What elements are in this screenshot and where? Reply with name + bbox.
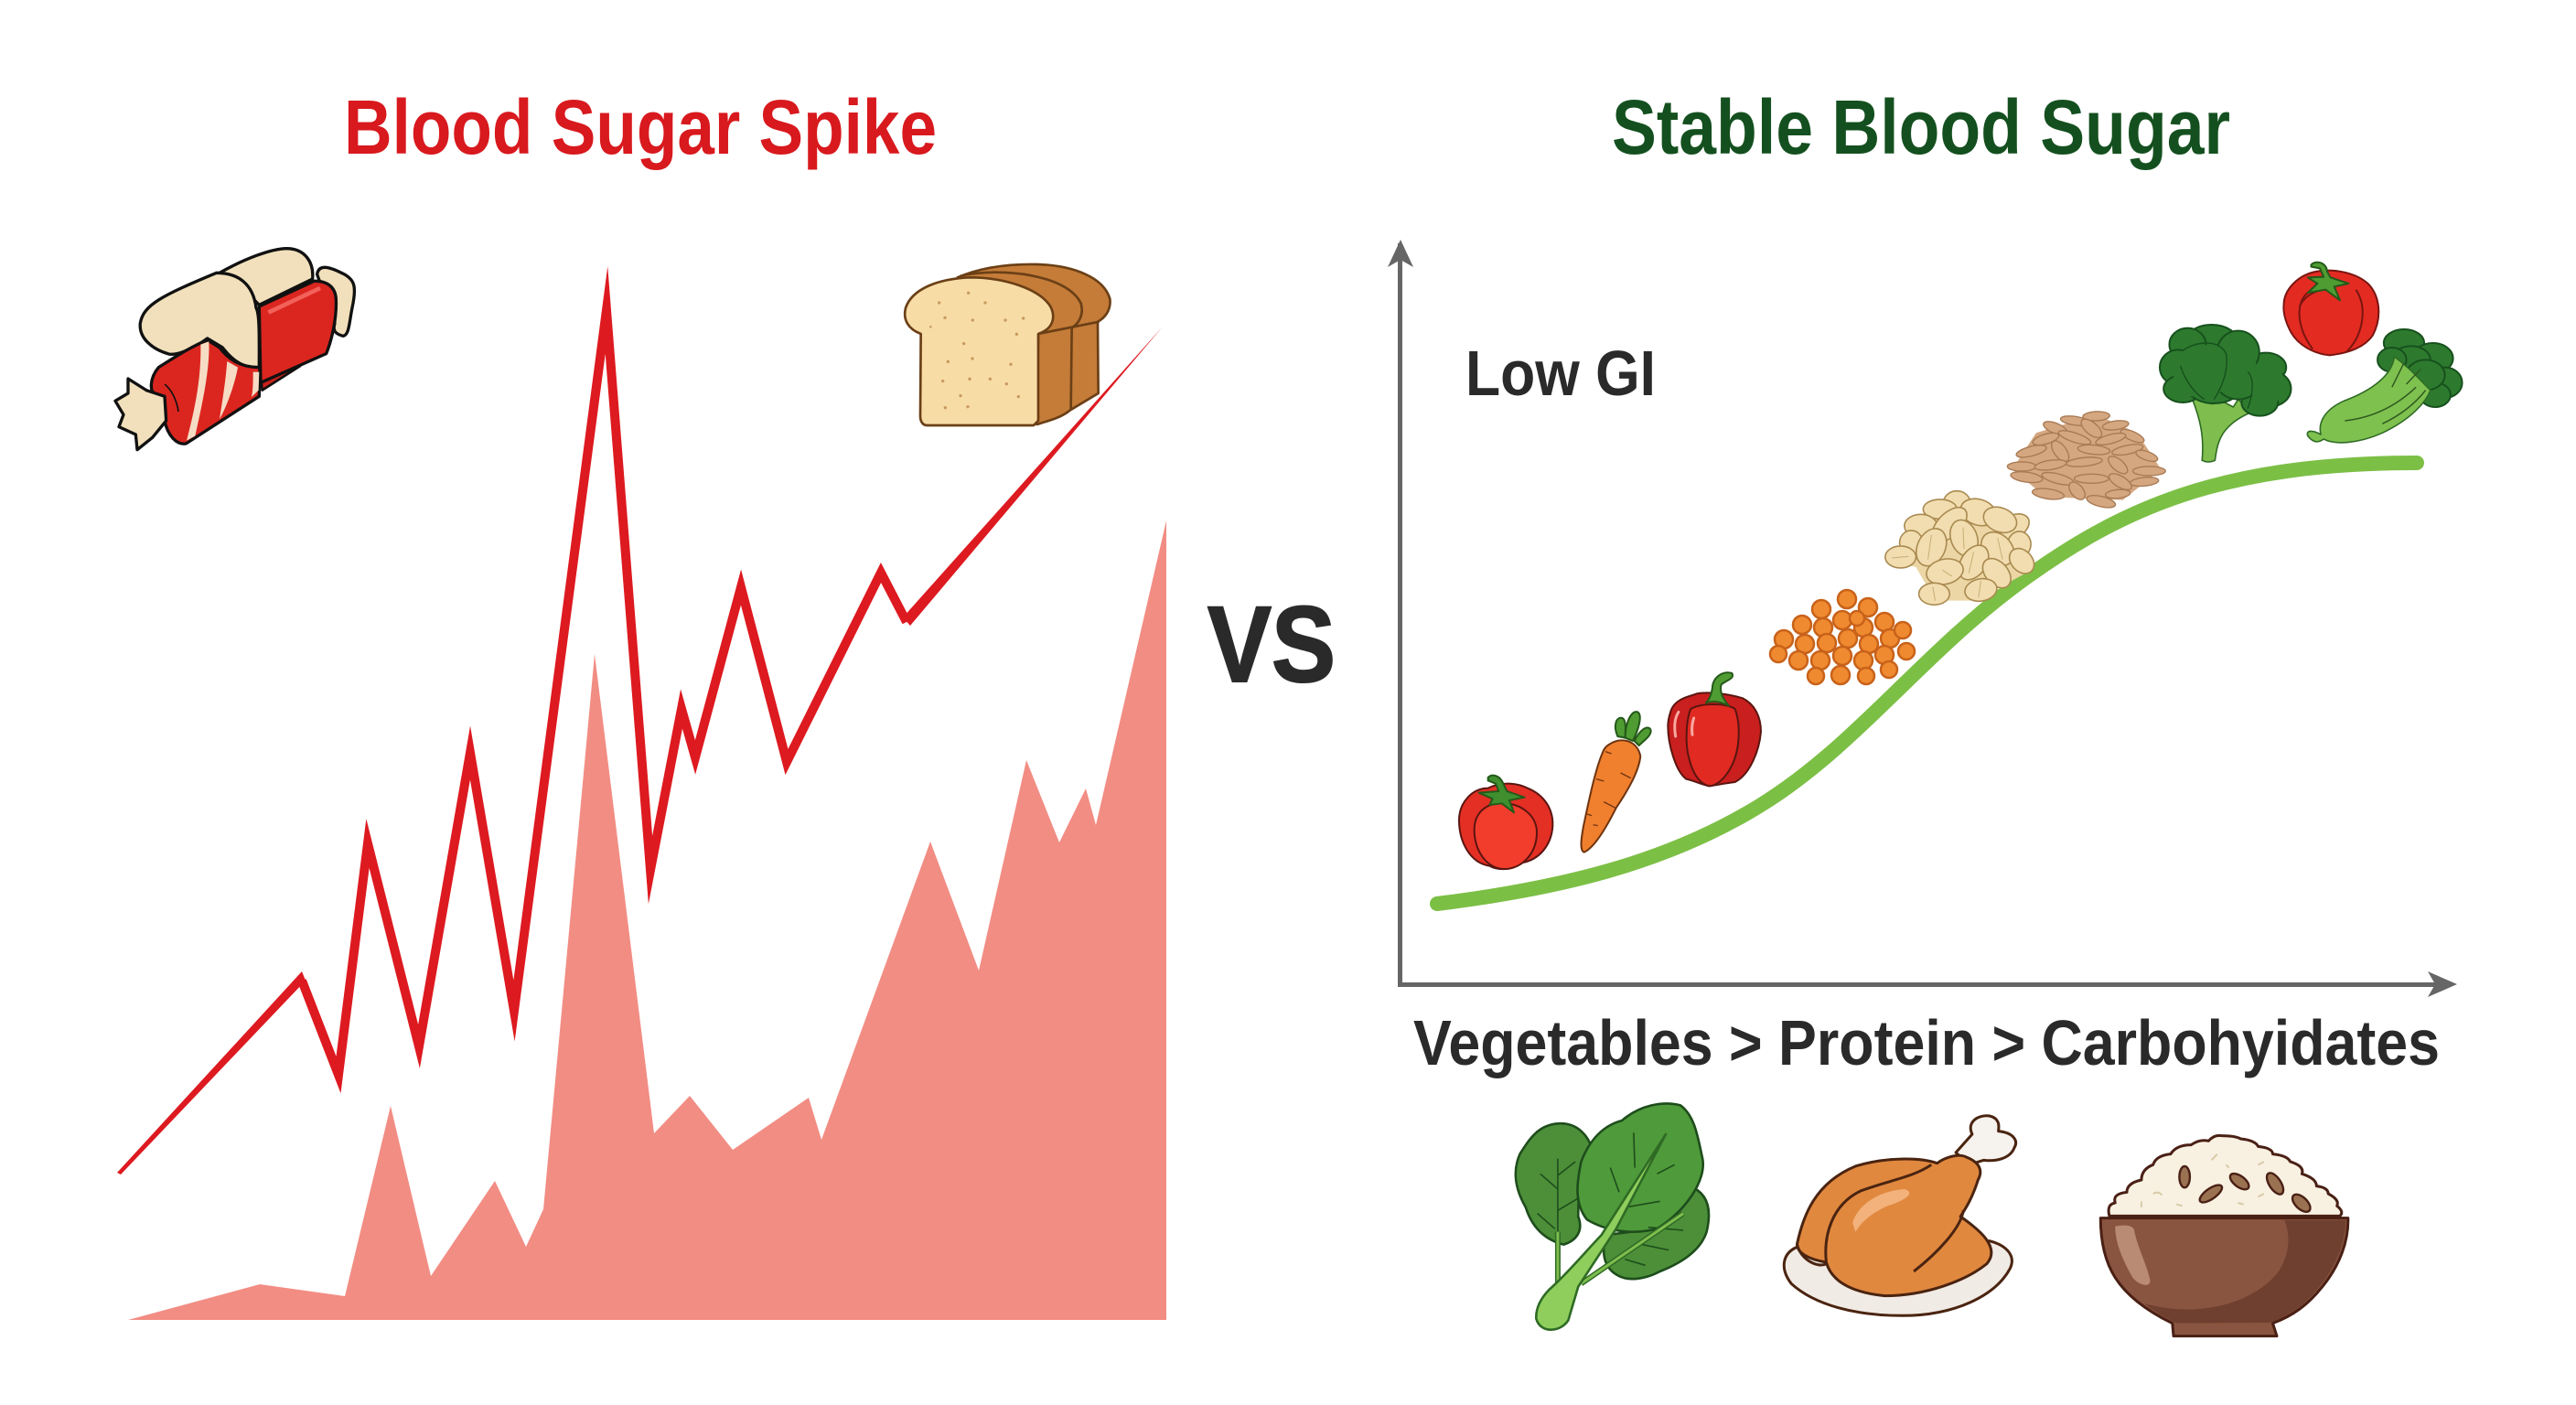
icon: roast chicken xyxy=(1784,1116,2016,1315)
axes with arrows xyxy=(1388,240,2457,997)
label: Low GI: Low GI xyxy=(1465,338,1656,409)
icon: oats xyxy=(1885,491,2038,605)
title: Blood Sugar Spike: Blood Sugar Spike xyxy=(344,84,937,170)
line chart: blood sugar spike xyxy=(117,310,1163,1174)
icon: red lentils xyxy=(1770,590,1915,684)
icon: tomato xyxy=(1459,776,1552,869)
icon: red bell pepper xyxy=(1668,672,1761,786)
icon: leafy greens xyxy=(1516,1103,1709,1330)
icon: broccoli xyxy=(2160,325,2291,462)
icon: small red pepper xyxy=(2283,263,2378,355)
title: Stable Blood Sugar: Stable Blood Sugar xyxy=(1612,84,2230,170)
label: food order: Vegetables > Protein > Carbohyidates xyxy=(1413,1007,2440,1078)
icon: brown grains xyxy=(2007,411,2165,510)
icon: carrot xyxy=(1581,712,1651,853)
area chart: spike shadow xyxy=(128,520,1166,1320)
icon: zucchini with broccoli top xyxy=(2307,329,2463,443)
icon: bread loaf xyxy=(905,264,1111,425)
icon: candy xyxy=(115,249,355,450)
stable curve xyxy=(1437,463,2417,904)
vs label: VS xyxy=(1208,585,1336,705)
icon: rice bowl xyxy=(2100,1135,2348,1336)
